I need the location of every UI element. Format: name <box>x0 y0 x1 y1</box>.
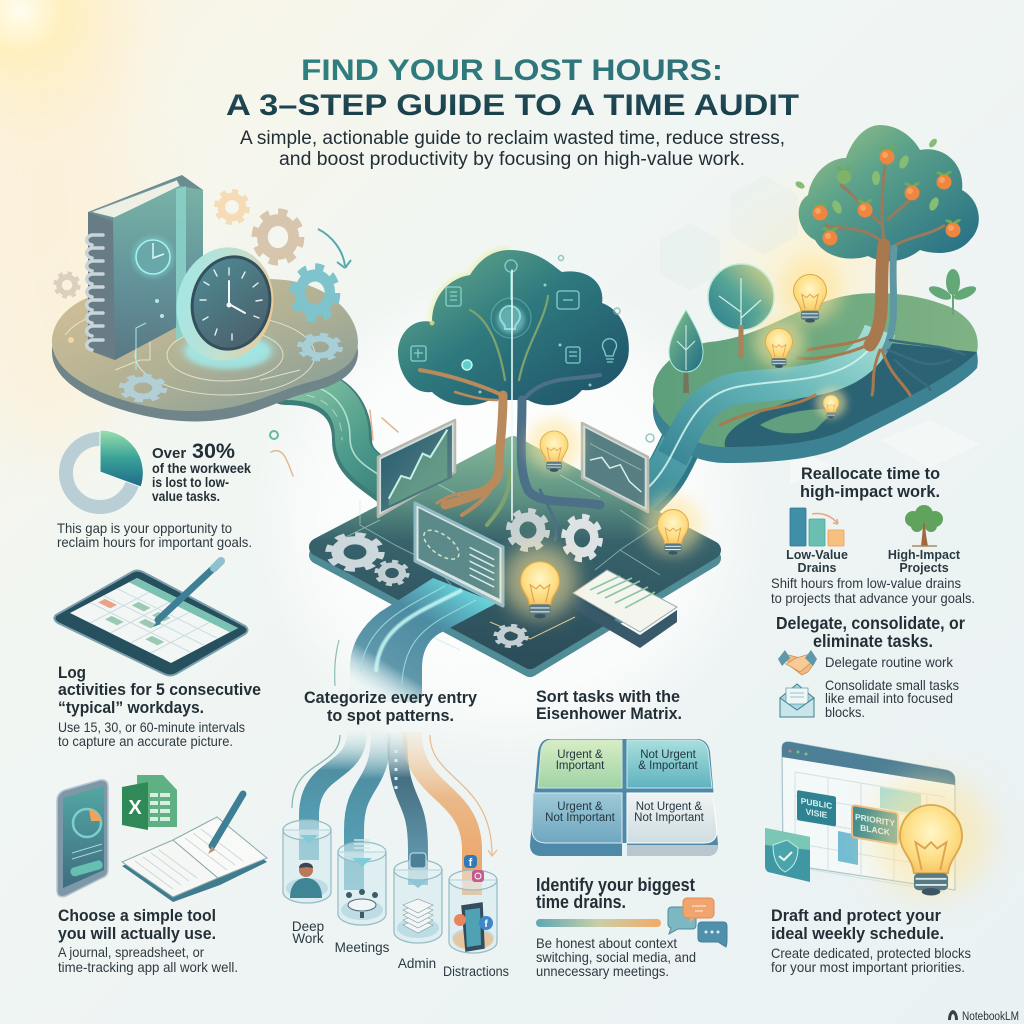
gradient bar <box>536 919 661 927</box>
stat body text <box>57 520 252 550</box>
cylinder: admin <box>394 853 442 943</box>
central platform <box>318 250 712 702</box>
text: consolidate <box>825 677 959 720</box>
cylinder: distractions: f <box>469 857 473 869</box>
text: choose tool <box>58 944 238 975</box>
stream over garden <box>670 330 880 458</box>
calendar block: priority <box>852 805 898 845</box>
cylinder: distractions <box>449 855 497 953</box>
heading: draft schedule: Draft and protect your <box>771 906 941 925</box>
cylinder: meetings <box>338 840 386 925</box>
heading: draft schedule: ideal weekly schedule. <box>771 924 944 943</box>
bar and tree captions: Low-Value <box>786 548 848 562</box>
category labels: Distractions <box>443 964 509 979</box>
heading: sort tasks <box>536 687 682 723</box>
heading: delegate: Delegate, consolidate, or <box>776 613 965 633</box>
heading: reallocate: Reallocate time to <box>801 464 940 483</box>
weekly schedule window <box>765 742 990 896</box>
text: draft schedule <box>771 945 971 975</box>
text: choose tool: A journal, spreadsheet, or <box>58 944 204 960</box>
platform slab <box>318 445 712 668</box>
subtitle: and boost productivity by focusing on high-value work. <box>279 149 745 170</box>
four flowing streams <box>292 732 497 895</box>
front monitor <box>415 503 503 606</box>
title <box>226 54 799 122</box>
small pointed tree <box>669 310 703 393</box>
text: consolidate: blocks. <box>825 704 865 720</box>
heading: log activities <box>58 663 261 717</box>
heading: delegate: eliminate tasks. <box>813 631 933 651</box>
text: shift hours: to projects that advance your goals. <box>771 590 975 606</box>
window frame <box>782 742 955 892</box>
text: time drains: unnecessary meetings. <box>536 963 669 979</box>
text: shift hours: Shift hours from low-value drains <box>771 575 961 591</box>
text: log intervals <box>58 719 245 749</box>
cell: urgent important: Important <box>556 760 605 772</box>
stat: over 30 percent: is lost to low- <box>152 475 229 490</box>
cell: not urgent not important <box>627 793 717 843</box>
cylinder: distractions: f <box>484 919 488 930</box>
subtitle <box>240 128 785 170</box>
text: shift hours <box>771 575 975 606</box>
stat: over 30 percent <box>152 440 251 504</box>
heading: choose tool <box>58 906 216 943</box>
text: time drains <box>536 935 696 979</box>
big tree trunk and roots <box>720 245 965 425</box>
text: draft schedule: for your most important priorities. <box>771 959 965 975</box>
tree canopy <box>398 250 629 405</box>
stat body text: reclaim hours for important goals. <box>57 534 252 550</box>
category labels: Deep <box>292 919 324 934</box>
heading: sort tasks: Sort tasks with the <box>536 687 680 706</box>
heading: time drains <box>536 875 695 912</box>
document on platform <box>573 570 677 648</box>
heading: sort tasks: Eisenhower Matrix. <box>536 704 682 723</box>
icon: envelope <box>780 684 814 717</box>
heading: log activities: activities for 5 consecutive <box>58 680 261 699</box>
orbit dots around tree <box>558 256 654 442</box>
cell: urgent important: Urgent & <box>557 749 603 761</box>
gears around clock <box>55 191 340 400</box>
cell: not urgent important <box>627 740 712 788</box>
garden bulbs <box>753 260 846 418</box>
calendar block: priority: BLACK <box>860 822 891 838</box>
text: delegate routine: Delegate routine work <box>825 654 954 670</box>
garden platform with growing tree <box>653 125 979 463</box>
stat: over 30 percent: value tasks. <box>152 489 220 504</box>
road: left platform to centre <box>270 383 415 510</box>
icon: spreadsheet: X <box>128 797 142 819</box>
big clock <box>166 238 284 370</box>
heading: reallocate: high-impact work. <box>800 482 940 501</box>
category cylinders <box>283 820 497 953</box>
sprout <box>927 269 978 315</box>
text: draft schedule: Create dedicated, protected blocks <box>771 945 971 961</box>
stat: over 30 percent: of the workweek <box>152 461 251 476</box>
cell: urgent not important <box>532 793 622 843</box>
left monitor <box>378 420 455 517</box>
large bulb <box>872 777 990 896</box>
road: platform down to categories <box>335 578 497 702</box>
notebook <box>87 175 203 370</box>
text: consolidate: Consolidate small tasks <box>825 677 959 693</box>
garden slab <box>653 293 978 463</box>
cell: not urgent important: & Important <box>638 760 699 772</box>
small round tree <box>708 264 774 358</box>
bar and tree captions: High-Impact <box>888 548 961 562</box>
cell: urgent not important: Not Important <box>545 812 616 824</box>
bar and tree captions: Drains <box>798 561 836 575</box>
text: time drains: switching, social media, and <box>536 949 696 965</box>
category labels: Admin <box>398 956 436 971</box>
cell: not urgent not important: Not Important <box>634 812 705 824</box>
heading: log activities: Log <box>58 663 86 682</box>
heading: draft schedule <box>771 906 944 943</box>
platform gears <box>329 511 600 646</box>
stat body text: This gap is your opportunity to <box>57 520 232 536</box>
cell: urgent not important: Urgent & <box>557 801 603 813</box>
road: right garden to centre <box>630 332 878 512</box>
calendar block: public: PUBLIC <box>801 796 832 811</box>
platform base <box>52 279 358 422</box>
shield panel <box>765 828 810 882</box>
text: time drains: Be honest about context <box>536 935 677 951</box>
text: log intervals: to capture an accurate picture. <box>58 733 233 749</box>
heading: log activities: “typical” workdays. <box>58 698 204 717</box>
title: FIND YOUR LOST HOURS: <box>301 54 723 87</box>
stat: over 30 percent: Over <box>152 445 186 462</box>
calendar block: public <box>797 790 836 827</box>
icon: chat bubbles <box>668 898 727 947</box>
left platform with clock, notebook and gears <box>52 175 358 422</box>
text: choose tool: time-tracking app all work well. <box>58 959 238 975</box>
category labels: Work <box>292 931 324 946</box>
subtitle: A simple, actionable guide to reclaim wasted time, reduce stress, <box>240 128 785 149</box>
icon: open notebook with pen <box>122 794 267 902</box>
text: consolidate: like email into focused <box>825 690 953 706</box>
bar and tree captions <box>786 548 961 575</box>
bar and tree captions: Projects <box>899 561 949 575</box>
icon: handshake <box>778 650 817 675</box>
icon: tablet with pen <box>54 561 248 676</box>
calendar block: public: VISIE <box>806 807 828 820</box>
heading: categorize: to spot patterns. <box>327 706 454 725</box>
title: A 3–STEP GUIDE TO A TIME AUDIT <box>226 89 799 122</box>
heading: time drains: Identify your biggest <box>536 875 695 895</box>
heading: categorize: Categorize every entry <box>304 688 478 707</box>
heading: delegate <box>776 613 965 651</box>
donut chart <box>66 430 143 507</box>
cell: not urgent not important: Not Urgent & <box>636 801 703 813</box>
icon: shrinking bars <box>790 508 844 546</box>
heading: choose tool: you will actually use. <box>58 924 216 943</box>
right monitor <box>582 423 648 512</box>
category labels <box>292 919 509 979</box>
eisenhower matrix <box>530 739 718 856</box>
big tree canopy <box>794 125 979 261</box>
arrow curving around gears <box>318 229 351 268</box>
icon: phone with timer <box>57 780 108 897</box>
icon: mini tree <box>905 505 943 546</box>
heading: time drains: time drains. <box>536 892 626 912</box>
stat: over 30 percent: 30% <box>192 440 235 463</box>
glowing bulbs <box>503 418 702 618</box>
cell: not urgent important: Not Urgent <box>640 749 697 761</box>
heading: choose tool: Choose a simple tool <box>58 906 216 925</box>
cell: urgent important <box>538 740 622 788</box>
heading: categorize <box>304 688 478 725</box>
watermark: NotebookLM <box>948 1010 1019 1023</box>
icon: spreadsheet <box>122 775 177 830</box>
heading: reallocate <box>800 464 940 501</box>
tree trunk and roots <box>420 270 600 540</box>
cylinder: deep work <box>283 820 331 903</box>
calendar block: priority: PRIORITY <box>855 812 895 828</box>
text: log intervals: Use 15, 30, or 60-minute intervals <box>58 719 245 735</box>
category labels: Meetings <box>335 940 390 955</box>
